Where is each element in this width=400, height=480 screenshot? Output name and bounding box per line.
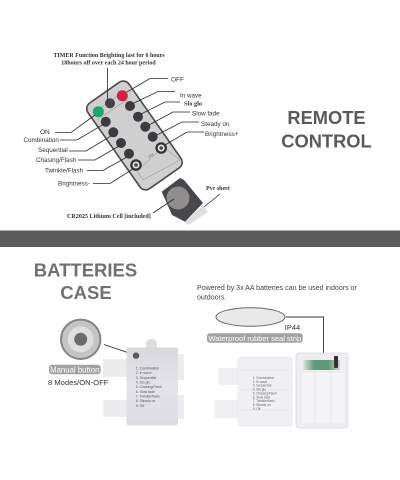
remote labels: Steady on <box>201 121 230 128</box>
remote labels: Combination <box>24 137 59 144</box>
remote labels: Brightness+ <box>205 131 239 138</box>
lid mode list: 3. Sequential <box>253 384 272 388</box>
battery case closed <box>103 339 184 426</box>
waterproof label: Waterproof rubber seal strip <box>208 334 301 343</box>
off button <box>117 90 128 101</box>
timer button <box>105 98 115 108</box>
circuit board <box>303 360 340 370</box>
lid mode list: 7. Twinkle/flash <box>253 399 275 403</box>
remote labels: Brightness- <box>58 180 90 188</box>
open case lid <box>215 357 292 426</box>
timer label: TIMER Function Brighting last for 6 hours <box>53 53 165 59</box>
power description: outdoors. <box>197 294 226 302</box>
lid mode list: 8. Steady on <box>253 403 271 407</box>
battery cell holder <box>162 178 208 225</box>
arrow to manual button <box>104 344 132 354</box>
timer sublabel: 18hours off over each 24 hour period <box>61 60 156 66</box>
case button <box>133 352 139 359</box>
manual button label: Manual button <box>50 365 100 374</box>
battery bays <box>301 372 345 424</box>
on button <box>93 106 104 117</box>
remote labels: OFF <box>171 76 184 84</box>
brightness minus button <box>130 159 142 171</box>
lid mode list: 4. Slo glo <box>253 388 266 392</box>
batteries case heading <box>34 260 137 303</box>
IP44 label: IP44 <box>285 323 300 332</box>
remote control <box>84 78 185 193</box>
seal arrow <box>286 317 324 353</box>
power description: Powered by 3x AA batteries can be used indoors or <box>197 285 357 292</box>
power description <box>197 285 357 302</box>
seal strip <box>216 308 285 326</box>
case mode list: 2. In wave <box>136 371 152 375</box>
remote labels: In wave <box>180 92 202 100</box>
manual button close-up <box>60 319 101 360</box>
case mode list: 7. Twinkle/flash <box>136 394 160 398</box>
batteries case heading: CASE <box>60 282 112 303</box>
cell leader <box>153 199 174 213</box>
dim label: DIM <box>147 152 154 159</box>
batteries case heading: BATTERIES <box>34 260 137 280</box>
switch <box>334 356 338 368</box>
case mode list: 4. Slo glo <box>136 380 150 384</box>
case mode list: 3. Sequential <box>136 376 156 380</box>
modes label: 8 Modes/ON-OFF <box>48 378 109 387</box>
remote labels <box>24 76 239 220</box>
lid mode list: 2. In wave <box>253 380 267 384</box>
remote labels: Pvc sheet <box>206 186 230 192</box>
lid mode list: 9. Off <box>253 407 261 411</box>
lid mode list: 1. Combination <box>253 376 274 380</box>
brightness plus button <box>155 142 167 154</box>
remote labels: Sequential <box>38 147 68 154</box>
case mode list: 1. Combination <box>136 366 159 370</box>
coin cell <box>166 186 190 210</box>
case mode list: 6. Slow fade <box>136 390 155 394</box>
lid mode list: 6. Slow fade <box>253 395 270 399</box>
remote labels: Chasing/Flash <box>36 157 77 164</box>
remote labels: CR2025 Lithium Cell [included] <box>67 214 151 220</box>
open case body <box>296 353 348 428</box>
leader lines <box>55 68 220 211</box>
numbered buttons <box>101 101 158 159</box>
case mode list: 5. Chasing/Flash <box>136 385 162 389</box>
remote control heading: REMOTE <box>287 107 366 128</box>
lid mode list: 5. Chasing/Flash <box>253 392 277 396</box>
case mode list: 9. Off <box>136 404 144 408</box>
case mode list: 8. Steady on <box>136 399 155 403</box>
remote labels: Slow fade <box>192 110 220 118</box>
gray divider band <box>0 230 400 247</box>
remote labels: Twinkle/Flash <box>45 168 84 174</box>
lid mode list <box>253 376 277 411</box>
remote control heading <box>281 107 372 152</box>
remote control heading: CONTROL <box>281 130 372 152</box>
remote labels: Slo glo <box>184 100 202 108</box>
remote labels: ON <box>40 129 50 136</box>
case mode list <box>136 366 162 408</box>
